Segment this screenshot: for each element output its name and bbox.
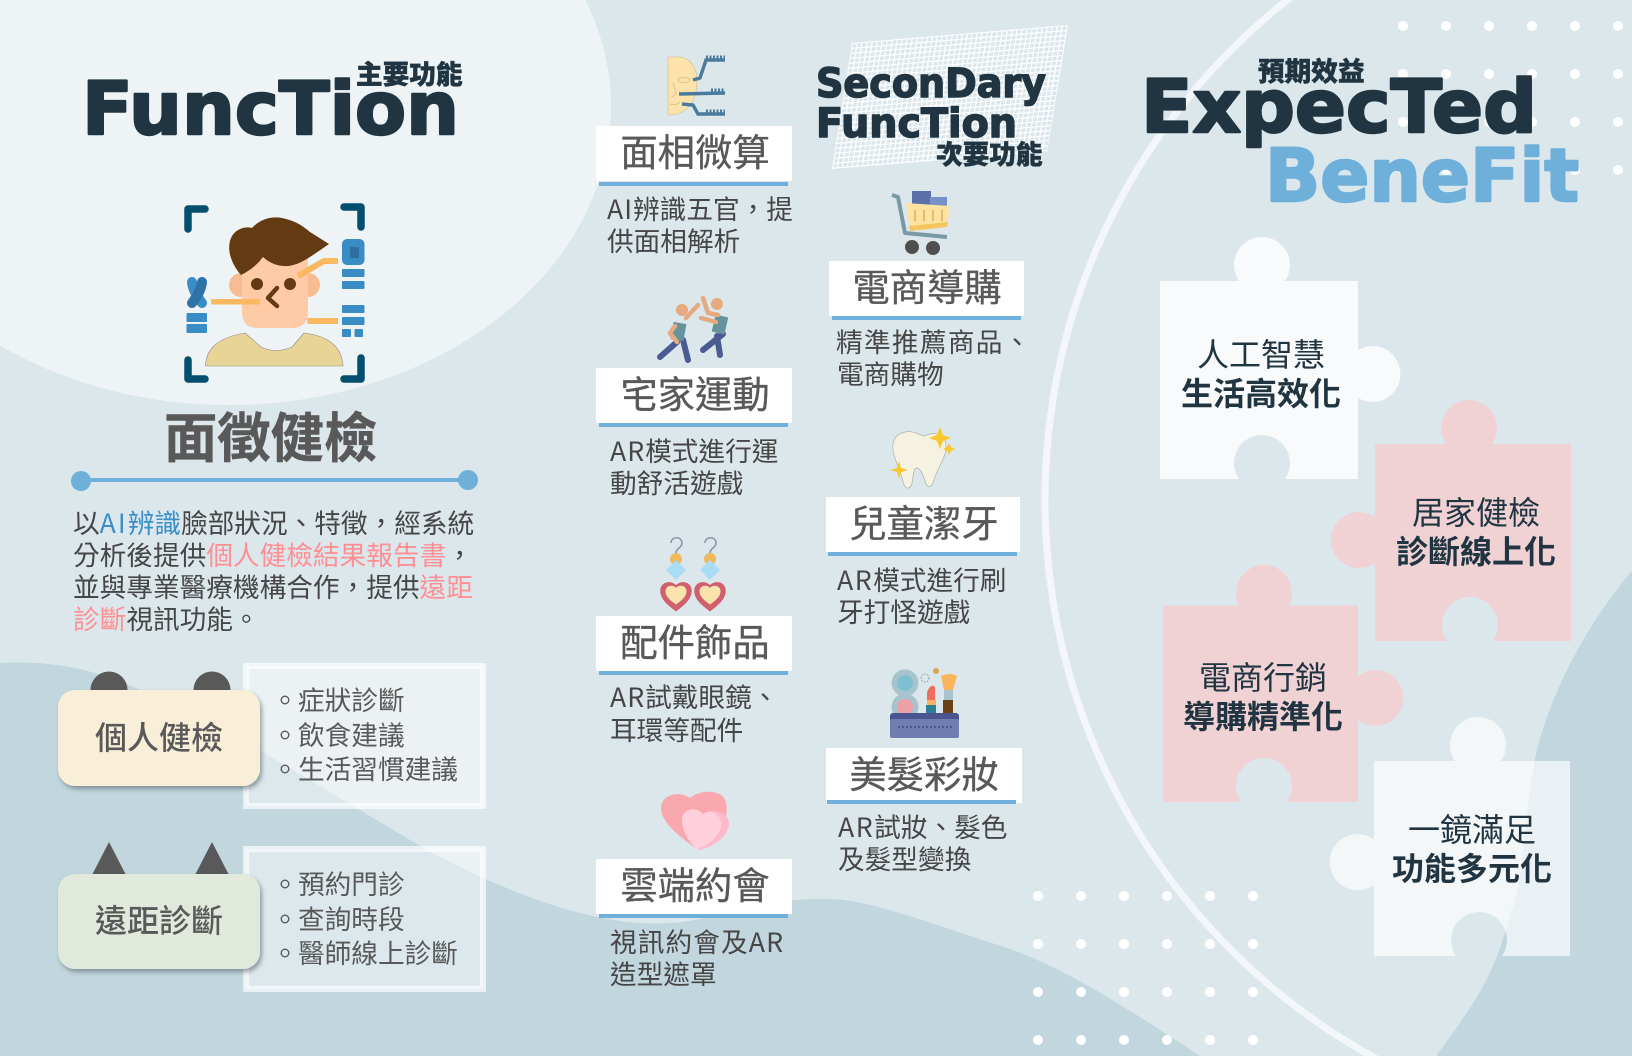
text: e-commerce guide: 精準推薦商品、	[836, 321, 1032, 360]
tag: telemedicine	[58, 842, 260, 969]
panel: telemedicine list: 醫師線上診斷	[298, 932, 458, 971]
card heading: accessories: 配件飾品	[620, 613, 770, 667]
icon: earrings	[660, 538, 726, 612]
panel: personal health list: 飲食建議	[298, 714, 405, 753]
puzzle: multifunctional mirror: 功能多元化	[1392, 844, 1552, 890]
intro text: 分析後提供個人健檢結果報告書，	[73, 534, 473, 573]
tag: personal health check: 個人健檢	[95, 713, 223, 759]
card heading: hair and makeup: 美髮彩妝	[849, 745, 999, 799]
panel: telemedicine list: 預約門診	[298, 863, 405, 902]
text: cloud dating: 造型遮罩	[610, 953, 717, 992]
puzzle: home diagnosis online: 居家健檢	[1412, 488, 1540, 534]
panel: personal health list	[246, 666, 483, 806]
panel: secondary functions left column	[596, 57, 793, 992]
puzzle: home diagnosis online: 診斷線上化	[1396, 527, 1556, 573]
text: kids tooth brushing: 牙打怪遊戲	[837, 591, 970, 630]
panel: telemedicine list: 查詢時段	[298, 898, 405, 937]
title: Secondary Function: 次要功能	[936, 133, 1043, 172]
icon: makeup	[890, 668, 959, 738]
text: home workout: 動舒活遊戲	[610, 462, 743, 501]
intro text: 並與專業醫療機構合作，提供遠距	[73, 566, 473, 605]
icon: face computing	[668, 57, 725, 115]
icon: hearts	[661, 792, 729, 850]
card heading: e-commerce guide	[829, 258, 1024, 320]
card heading: kids tooth brushing: 兒童潔牙	[849, 494, 999, 548]
text: home workout	[610, 430, 778, 501]
subtitle: main function: 主要功能	[356, 53, 463, 92]
panel: telemedicine list	[246, 849, 483, 989]
divider line with end dots	[71, 470, 478, 491]
tag: telemedicine: 遠距診斷	[95, 896, 223, 942]
text: accessories	[610, 676, 778, 748]
title: Secondary Function: FuncTion	[816, 101, 1017, 147]
text: kids tooth brushing	[837, 559, 1006, 630]
icon: tooth	[890, 427, 955, 488]
panel: expected benefit	[1141, 50, 1579, 956]
text: accessories: AR試戴眼鏡、	[610, 676, 778, 715]
title: FuncTion: FuncTion	[82, 67, 459, 152]
intro text	[73, 502, 474, 637]
text: face computing	[607, 188, 793, 259]
icon: home workout	[660, 298, 723, 360]
puzzle: AI efficient life: 生活高效化	[1181, 369, 1341, 415]
title: Secondary Function: SeconDary	[816, 61, 1046, 107]
icon: shopping cart	[892, 191, 950, 255]
title: Expected Benefit: 預期效益	[1258, 50, 1365, 89]
text: face computing: AI辨識五官，提	[607, 188, 793, 227]
panel: main function	[58, 53, 483, 989]
text: hair and makeup	[838, 806, 1007, 877]
card heading: cloud dating	[596, 856, 792, 918]
puzzle: precise e-commerce: 導購精準化	[1183, 692, 1343, 738]
title: Expected Benefit: BeneFit	[1265, 134, 1579, 219]
panel: personal health list: 症狀診斷	[298, 679, 405, 718]
icon: face scan	[186, 207, 364, 379]
text: face computing: 供面相解析	[607, 220, 740, 259]
text: accessories: 耳環等配件	[610, 709, 743, 748]
card heading: hair and makeup	[826, 745, 1022, 804]
puzzle: multifunctional mirror: 一鏡滿足	[1408, 805, 1536, 851]
text: e-commerce guide: 電商購物	[837, 353, 944, 392]
text: home workout: AR模式進行運	[610, 430, 778, 469]
puzzle: multifunctional mirror	[1330, 717, 1570, 956]
title: Expected Benefit: ExpecTed	[1141, 65, 1537, 150]
text: kids tooth brushing: AR模式進行刷	[837, 559, 1006, 598]
card heading: face computing: 面相微算	[620, 123, 770, 177]
text: cloud dating	[610, 921, 784, 992]
card heading: home workout	[596, 365, 792, 427]
puzzle: precise e-commerce	[1163, 565, 1403, 802]
intro text: 診斷視訊功能。	[73, 598, 260, 637]
panel: personal health list: 生活習慣建議	[298, 748, 458, 787]
text: cloud dating: 視訊約會及AR	[610, 921, 784, 960]
title: Secondary Function	[816, 61, 1046, 172]
card heading: kids tooth brushing	[826, 494, 1020, 556]
card heading: cloud dating: 雲端約會	[620, 856, 770, 910]
puzzle: AI efficient life: 人工智慧	[1197, 330, 1325, 376]
heading: face health check: 面徵健檢	[164, 396, 377, 473]
panel: secondary functions right column	[816, 61, 1046, 877]
text: hair and makeup: AR試妝、髮色	[838, 806, 1007, 845]
card heading: home workout: 宅家運動	[620, 365, 770, 419]
card heading: e-commerce guide: 電商導購	[852, 258, 1002, 312]
text: hair and makeup: 及髮型變換	[838, 838, 971, 877]
puzzle: home diagnosis online	[1331, 400, 1571, 641]
puzzle: AI efficient life	[1160, 237, 1400, 479]
tag: personal health check	[58, 672, 260, 786]
title: Expected Benefit	[1141, 50, 1579, 219]
text: e-commerce guide	[836, 321, 1032, 392]
puzzle: precise e-commerce: 電商行銷	[1199, 653, 1327, 699]
card heading: accessories	[596, 613, 792, 675]
intro text: 以AI辨識臉部狀況、特徵，經系統	[73, 502, 474, 541]
card heading: face computing	[596, 123, 792, 186]
